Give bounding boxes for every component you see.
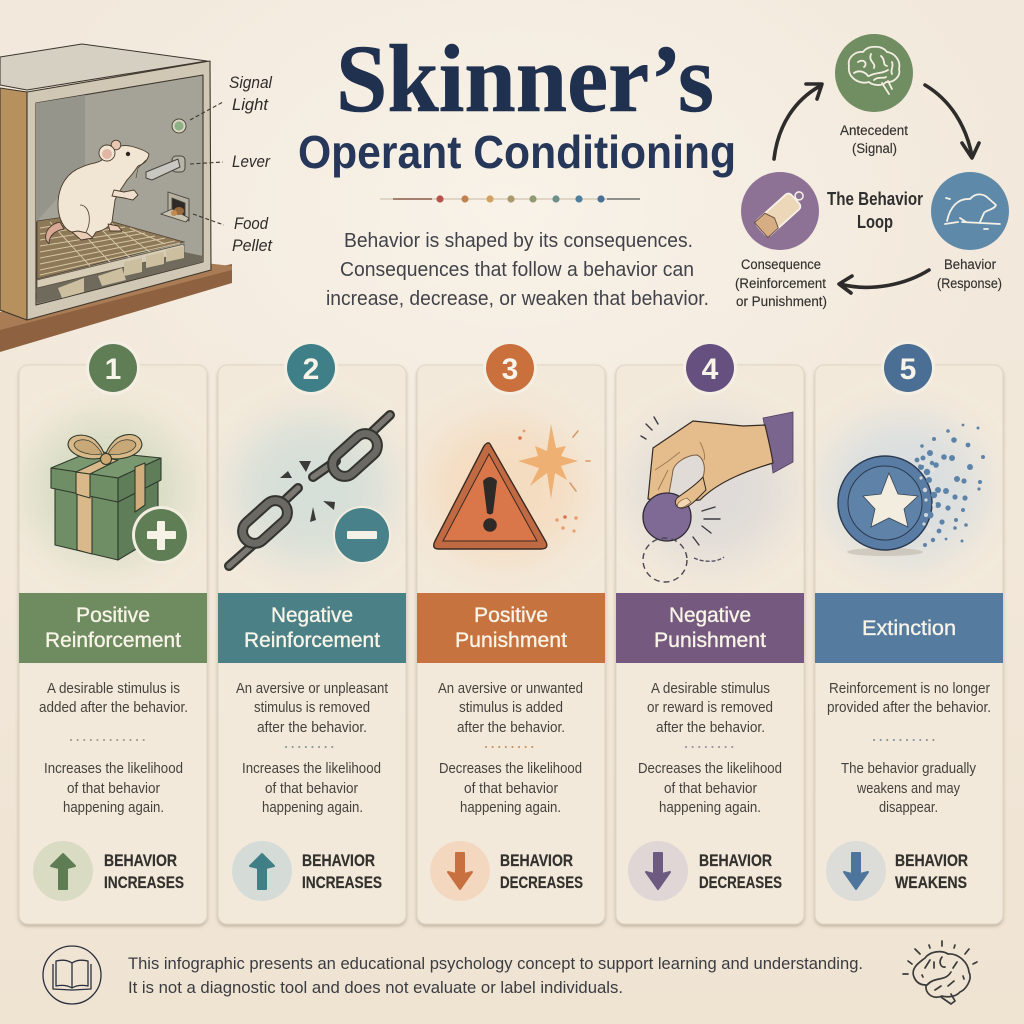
behavior node	[931, 172, 1009, 291]
leader lines	[190, 102, 224, 225]
effect: Decreases the likelihood	[439, 761, 582, 777]
header band: Negative	[271, 604, 353, 627]
header band: Positive	[76, 604, 150, 627]
lever	[146, 156, 185, 180]
diagram: the behavior loop	[735, 34, 1009, 309]
food hatch and pellet	[161, 192, 189, 222]
arrows	[774, 84, 979, 293]
behavior node: (Response)	[937, 276, 1002, 291]
intro paragraph: Behavior is shaped by its consequences.	[344, 230, 693, 252]
header band: Extinction	[862, 617, 956, 640]
header band: Reinforcement	[244, 629, 380, 652]
panel: 1 positive reinforcement	[19, 341, 207, 924]
number badge 2	[284, 341, 338, 395]
number badge 3: 3	[502, 353, 518, 386]
number badge 4: 4	[702, 353, 719, 386]
consequence node	[735, 172, 827, 309]
icon: hand removing token	[641, 412, 793, 582]
rat	[46, 140, 149, 244]
watercolor wash	[30, 418, 186, 562]
icon: open book	[43, 946, 101, 1004]
effect: Decreases the likelihood	[638, 761, 782, 777]
header band: Punishment	[455, 629, 567, 652]
header band	[815, 593, 1003, 663]
intro paragraph: increase, decrease, or weaken that behavior.	[326, 288, 709, 310]
number badge 4	[683, 341, 737, 395]
title	[298, 25, 736, 178]
definition	[647, 681, 773, 736]
effect: The behavior gradually	[841, 761, 977, 777]
icon: broken chain with minus	[229, 415, 391, 566]
effect	[44, 761, 183, 816]
definition: after the behavior.	[257, 720, 367, 736]
definition: after the behavior.	[656, 720, 765, 736]
definition: stimulus is removed	[254, 700, 370, 716]
icon: gift box with plus	[51, 435, 190, 564]
antecedent node: Antecedent	[840, 123, 908, 138]
title: Operant Conditioning	[298, 126, 736, 178]
icon: brain with rays	[903, 941, 977, 1004]
header band	[616, 593, 804, 663]
panel: 3 positive punishment	[417, 341, 605, 924]
labels: signal light, lever, food pellet: Food	[234, 214, 268, 233]
labels: signal light, lever, food pellet: Lever	[232, 152, 271, 171]
watercolor wash	[827, 418, 983, 562]
loop heading	[827, 189, 923, 232]
effect: Increases the likelihood	[44, 761, 183, 777]
outcome: behavior increases: BEHAVIOR	[104, 852, 177, 870]
icon: warning triangle and burst	[434, 424, 590, 549]
footer disclaimer: This infographic presents an educational psychology concept to support learning and understanding.	[128, 955, 863, 973]
header band: Negative	[669, 604, 751, 627]
header band: Reinforcement	[45, 629, 181, 652]
effect: disappear.	[879, 800, 938, 816]
antecedent node	[835, 34, 913, 156]
number badge 5	[881, 341, 935, 395]
header band	[218, 593, 406, 663]
signal light	[172, 119, 186, 133]
effect	[242, 761, 381, 816]
panel: 5 extinction	[815, 341, 1003, 924]
outcome: behavior increases	[232, 841, 382, 901]
number badge 3	[483, 341, 537, 395]
number badge 1	[86, 341, 140, 395]
panel: 4 negative punishment	[616, 341, 804, 924]
header band: Positive	[474, 604, 548, 627]
outcome: behavior decreases: BEHAVIOR	[500, 852, 573, 870]
definition: A desirable stimulus	[651, 681, 770, 697]
outcome: behavior weakens	[826, 841, 968, 901]
wooden shelf	[0, 262, 232, 352]
outcome: behavior weakens: BEHAVIOR	[895, 852, 968, 870]
header band	[417, 593, 605, 663]
loop heading: Loop	[857, 212, 893, 232]
definition	[827, 681, 991, 716]
effect: of that behavior	[464, 781, 558, 797]
number badge 2: 2	[303, 353, 319, 386]
consequence node: (Reinforcement	[735, 276, 826, 291]
illustration: Skinner box with rat	[0, 44, 273, 352]
outcome: behavior increases: INCREASES	[302, 874, 382, 892]
antecedent node: (Signal)	[852, 141, 897, 156]
definition: A desirable stimulus is	[47, 681, 180, 697]
effect: happening again.	[460, 800, 561, 816]
effect: Increases the likelihood	[242, 761, 381, 777]
box exterior	[0, 44, 211, 320]
consequence node: or Punishment)	[736, 294, 827, 309]
loop heading: The Behavior	[827, 189, 923, 209]
outcome: behavior decreases	[628, 841, 782, 901]
watercolor wash	[634, 418, 790, 562]
outcome: behavior decreases: DECREASES	[500, 874, 583, 892]
behavior node: Behavior	[944, 257, 996, 272]
header band: Punishment	[654, 629, 766, 652]
outcome: behavior decreases: BEHAVIOR	[699, 852, 772, 870]
title: Skinner’s	[336, 25, 714, 132]
outcome: behavior weakens: WEAKENS	[895, 874, 967, 892]
footer disclaimer: It is not a diagnostic tool and does not evaluate or label individuals.	[128, 979, 623, 997]
definition: Reinforcement is no longer	[829, 681, 990, 697]
definition: An aversive or unwanted	[438, 681, 583, 697]
outcome: behavior increases	[33, 841, 184, 901]
footer disclaimer	[128, 955, 863, 997]
particles	[915, 424, 985, 547]
definition	[438, 681, 583, 736]
effect: happening again.	[63, 800, 164, 816]
definition: after the behavior.	[457, 720, 565, 736]
header band	[19, 593, 207, 663]
definition	[236, 681, 388, 736]
effect	[638, 761, 782, 816]
labels: signal light, lever, food pellet: Pellet	[232, 236, 273, 255]
definition	[39, 681, 188, 716]
labels: signal light, lever, food pellet	[229, 73, 273, 255]
definition: stimulus is added	[459, 700, 563, 716]
decorative dotted divider	[380, 195, 640, 203]
floor grid	[36, 214, 203, 304]
number badge 5: 5	[900, 353, 916, 386]
icon: dissolving star coin	[838, 424, 985, 556]
outcome: behavior increases: INCREASES	[104, 874, 184, 892]
definition: or reward is removed	[647, 700, 773, 716]
definition: provided after the behavior.	[827, 700, 991, 716]
effect: happening again.	[262, 800, 363, 816]
effect: happening again.	[659, 800, 761, 816]
effect	[439, 761, 582, 816]
labels: signal light, lever, food pellet: Light	[232, 95, 269, 114]
intro paragraph: Consequences that follow a behavior can	[340, 259, 694, 281]
outcome: behavior increases: BEHAVIOR	[302, 852, 375, 870]
watercolor wash	[234, 418, 390, 562]
panel: 2 negative reinforcement	[218, 341, 406, 924]
effect: of that behavior	[664, 781, 757, 797]
watercolor wash	[427, 418, 583, 562]
effect: of that behavior	[265, 781, 358, 797]
definition: added after the behavior.	[39, 700, 188, 716]
effect	[841, 761, 977, 816]
labels: signal light, lever, food pellet: Signal	[229, 73, 273, 92]
outcome: behavior decreases	[430, 841, 583, 901]
effect: of that behavior	[67, 781, 160, 797]
outcome: behavior decreases: DECREASES	[699, 874, 782, 892]
number badge 1: 1	[105, 353, 121, 386]
definition: An aversive or unpleasant	[236, 681, 388, 697]
effect: weakens and may	[856, 781, 961, 797]
intro paragraph	[326, 230, 709, 310]
consequence node: Consequence	[741, 257, 821, 272]
